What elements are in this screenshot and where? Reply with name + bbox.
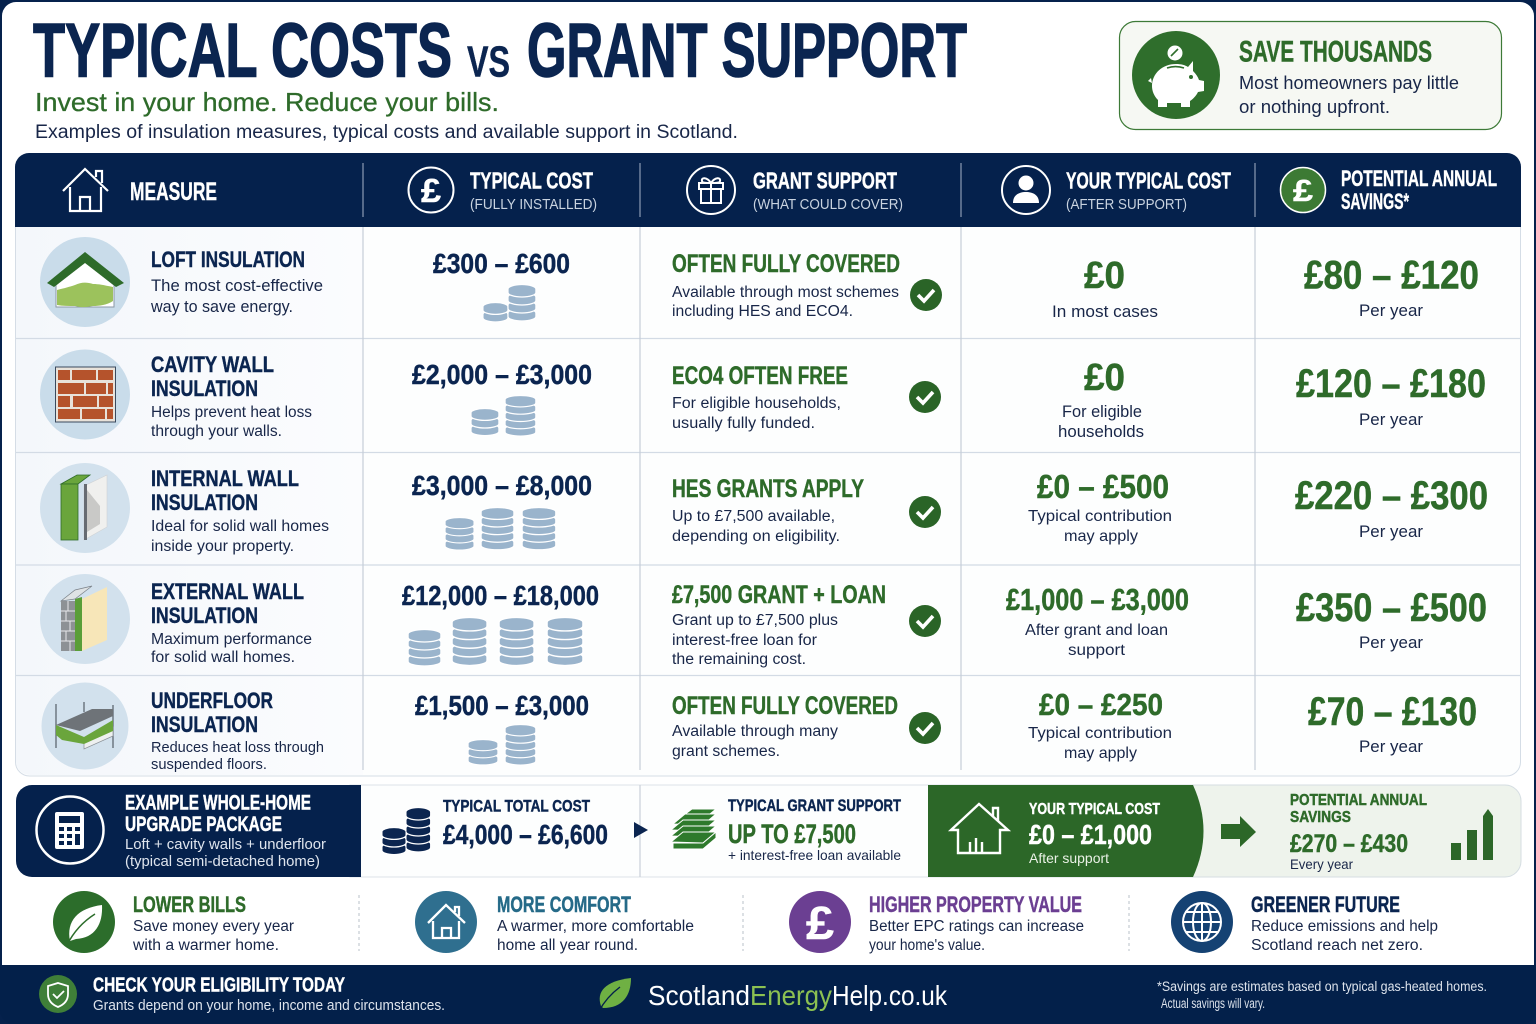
panel: typical grant support: + interest-free loan available bbox=[728, 847, 901, 863]
heading: typical cost: (FULLY INSTALLED) bbox=[470, 196, 597, 213]
row: loft insulation: £80 – £120 bbox=[1304, 254, 1479, 298]
panel: potential annual savings: £270 – £430 bbox=[1290, 830, 1408, 858]
icon: person bbox=[1002, 166, 1050, 214]
benefit: lower bills: with a warmer home. bbox=[132, 937, 279, 954]
panel: typical grant support: TYPICAL GRANT SUPPORT bbox=[728, 796, 901, 815]
row: external wall insulation: £7,500 GRANT + LOAN bbox=[672, 581, 886, 609]
row: underfloor insulation: suspended floors. bbox=[151, 756, 267, 773]
row: cavity wall insulation: For eligible bbox=[1062, 402, 1142, 421]
benefit: greener future: GREENER FUTURE bbox=[1251, 892, 1400, 917]
panel: potential annual savings bbox=[1290, 792, 1493, 872]
row: cavity wall insulation: INSULATION bbox=[151, 376, 258, 401]
row: cavity wall insulation: £0 bbox=[1084, 357, 1125, 399]
subtitle: Invest in your home. Reduce your bills. bbox=[35, 87, 499, 117]
panel: typical total cost: TYPICAL TOTAL COST bbox=[443, 796, 590, 816]
row: external wall insulation: Grant up to £7,500 plus bbox=[672, 612, 838, 629]
row: loft insulation: Per year bbox=[1359, 301, 1423, 320]
row: loft insulation: Available through most schemes bbox=[672, 284, 899, 301]
intro text: Examples of insulation measures, typical costs and available support in Scotland. bbox=[35, 122, 738, 143]
icon: navy coins bbox=[382, 808, 431, 855]
heading: potential annual savings bbox=[1341, 166, 1497, 214]
arrow: to savings bbox=[1221, 816, 1256, 847]
footnote: *Savings are estimates based on typical gas-heated homes. bbox=[1157, 979, 1487, 994]
icon: green pound: £ bbox=[1293, 173, 1313, 208]
heading: grant support: (WHAT COULD COVER) bbox=[753, 196, 903, 213]
title: GRANT SUPPORT bbox=[527, 8, 967, 94]
benefit: lower bills: LOWER BILLS bbox=[133, 892, 246, 917]
row: cavity wall insulation: ECO4 OFTEN FREE bbox=[672, 362, 848, 390]
row: cavity wall insulation: Per year bbox=[1359, 410, 1423, 429]
row: internal wall insulation: Typical contribution bbox=[1028, 508, 1172, 525]
arrow bbox=[634, 822, 648, 838]
row: internal wall insulation: may apply bbox=[1064, 528, 1138, 545]
comparison table bbox=[15, 153, 1521, 776]
row: internal wall insulation bbox=[40, 463, 1488, 555]
benefit: more comfort: A warmer, more comfortable bbox=[497, 918, 694, 935]
website name: Scotland bbox=[648, 980, 750, 1011]
row: cavity wall insulation: £2,000 – £3,000 bbox=[412, 359, 592, 390]
icon: brick wall bbox=[40, 350, 130, 440]
panel: potential annual savings: POTENTIAL ANNUAL bbox=[1290, 792, 1427, 809]
panel: package title bbox=[16, 785, 361, 877]
row: external wall insulation: support bbox=[1068, 642, 1126, 659]
row: external wall insulation: £1,000 – £3,000 bbox=[1006, 582, 1189, 617]
heading: your typical cost: (AFTER SUPPORT) bbox=[1066, 196, 1187, 213]
row: loft insulation: The most cost-effective bbox=[151, 277, 323, 295]
website name: Help.co.uk bbox=[832, 980, 948, 1011]
panel: typical grant support: UP TO £7,500 bbox=[728, 819, 856, 849]
row: cavity wall insulation: CAVITY WALL bbox=[151, 352, 274, 377]
row: external wall insulation: interest-free loan for bbox=[672, 632, 817, 649]
row: external wall insulation: the remaining cost. bbox=[672, 651, 806, 668]
panel: your typical cost: YOUR TYPICAL COST bbox=[1029, 801, 1160, 818]
callout: save thousands: or nothing upfront. bbox=[1239, 96, 1390, 117]
heading: grant support bbox=[753, 168, 903, 213]
row: internal wall insulation: £3,000 – £8,000 bbox=[412, 470, 592, 501]
row: internal wall insulation: depending on eligibility. bbox=[672, 528, 840, 545]
benefit: higher property value: Better EPC ratings can increase bbox=[869, 918, 1084, 935]
panel: your typical cost: After support bbox=[1029, 850, 1109, 866]
icon: home bbox=[63, 169, 108, 211]
row: underfloor insulation: £1,500 – £3,000 bbox=[415, 690, 589, 721]
icon: internal wall bbox=[40, 463, 130, 553]
row: loft insulation bbox=[40, 237, 1479, 327]
heading: your typical cost: YOUR TYPICAL COST bbox=[1066, 168, 1231, 194]
row: loft insulation: In most cases bbox=[1052, 302, 1158, 321]
footnote bbox=[1157, 979, 1487, 1011]
icon: pound: £ bbox=[421, 172, 442, 209]
title bbox=[33, 8, 967, 94]
panel: potential annual savings: SAVINGS bbox=[1290, 809, 1351, 826]
row: underfloor insulation: £70 – £130 bbox=[1308, 690, 1477, 734]
row: internal wall insulation: Ideal for solid wall homes bbox=[151, 518, 329, 535]
icon: external wall bbox=[40, 574, 130, 664]
row: underfloor insulation: grant schemes. bbox=[672, 743, 780, 760]
heading: grant support: GRANT SUPPORT bbox=[753, 168, 897, 194]
row: external wall insulation: Per year bbox=[1359, 633, 1423, 652]
eligibility call to action bbox=[93, 974, 445, 1014]
benefits row bbox=[53, 891, 1438, 954]
heading: measure: MEASURE bbox=[130, 178, 217, 206]
icon: green pound bbox=[1280, 168, 1326, 212]
heading: your typical cost bbox=[1066, 168, 1231, 213]
row: internal wall insulation: Up to £7,500 available, bbox=[672, 508, 835, 525]
row: internal wall insulation: inside your property. bbox=[151, 538, 294, 555]
row: underfloor insulation: INSULATION bbox=[151, 712, 258, 737]
benefit: higher property value: your home's value. bbox=[869, 937, 985, 954]
row: internal wall insulation: £220 – £300 bbox=[1295, 474, 1488, 518]
row: external wall insulation: for solid wall homes. bbox=[151, 649, 295, 666]
callout: save thousands bbox=[1120, 22, 1502, 130]
benefit: greener future: Reduce emissions and help bbox=[1251, 918, 1438, 935]
benefit: greener future: Scotland reach net zero. bbox=[1251, 937, 1423, 954]
row: loft insulation: OFTEN FULLY COVERED bbox=[672, 250, 900, 278]
title: TYPICAL COSTS bbox=[33, 8, 452, 94]
row: cavity wall insulation: For eligible households, bbox=[672, 395, 841, 412]
icon: gift bbox=[687, 166, 735, 214]
row: underfloor insulation: OFTEN FULLY COVERED bbox=[672, 692, 898, 720]
row: cavity wall insulation: usually fully funded. bbox=[672, 415, 815, 432]
row: loft insulation: including HES and ECO4. bbox=[672, 303, 853, 320]
row: internal wall insulation: INSULATION bbox=[151, 490, 258, 515]
benefit: more comfort bbox=[415, 891, 694, 954]
row: cavity wall insulation: through your walls. bbox=[151, 423, 282, 440]
row: underfloor insulation: UNDERFLOOR bbox=[151, 688, 273, 713]
panel: package title: UPGRADE PACKAGE bbox=[125, 813, 282, 836]
benefit: lower bills bbox=[53, 891, 294, 954]
icon: rising bars bbox=[1451, 809, 1493, 860]
row: underfloor insulation bbox=[42, 682, 1477, 773]
website name bbox=[648, 980, 948, 1011]
icon: underfloor bbox=[42, 682, 128, 770]
benefit: greener future bbox=[1171, 891, 1438, 954]
icon: shield bbox=[39, 975, 77, 1013]
icon: money stack bbox=[671, 809, 716, 849]
footnote: Actual savings will vary. bbox=[1161, 996, 1265, 1011]
row: external wall insulation: £350 – £500 bbox=[1296, 586, 1487, 630]
row: cavity wall insulation: £120 – £180 bbox=[1296, 362, 1486, 406]
panel: your typical cost: £0 – £1,000 bbox=[1029, 819, 1152, 850]
callout: save thousands: Most homeowners pay little bbox=[1239, 72, 1459, 93]
row: internal wall insulation: Per year bbox=[1359, 522, 1423, 541]
row: loft insulation: £0 bbox=[1084, 255, 1125, 297]
benefit: higher property value: £ bbox=[806, 897, 834, 949]
icon: piggy bank bbox=[1132, 31, 1220, 119]
row: underfloor insulation: Available through many bbox=[672, 723, 838, 740]
table body bbox=[16, 220, 1520, 776]
row: external wall insulation: £12,000 – £18,000 bbox=[402, 580, 599, 611]
row: internal wall insulation: INTERNAL WALL bbox=[151, 466, 299, 491]
row: loft insulation: £300 – £600 bbox=[433, 248, 570, 279]
row: internal wall insulation: £0 – £500 bbox=[1037, 468, 1169, 505]
row: external wall insulation: After grant and loan bbox=[1025, 622, 1168, 639]
heading: typical cost bbox=[470, 168, 597, 213]
row: cavity wall insulation: Helps prevent heat loss bbox=[151, 404, 312, 421]
row: external wall insulation: EXTERNAL WALL bbox=[151, 579, 304, 604]
strip background bbox=[340, 785, 1521, 877]
website name: Energy bbox=[750, 980, 832, 1011]
example package strip bbox=[16, 785, 1521, 877]
panel: package title: (typical semi-detached home) bbox=[125, 853, 320, 870]
benefit: more comfort: MORE COMFORT bbox=[497, 892, 631, 917]
row: underfloor insulation: £0 – £250 bbox=[1039, 687, 1163, 722]
row: external wall insulation: INSULATION bbox=[151, 603, 258, 628]
row: cavity wall insulation bbox=[40, 350, 1486, 441]
heading: typical cost: TYPICAL COST bbox=[470, 168, 593, 194]
row: external wall insulation bbox=[40, 574, 1487, 668]
row: loft insulation: way to save energy. bbox=[150, 298, 293, 316]
benefit: higher property value: HIGHER PROPERTY VALUE bbox=[869, 892, 1082, 917]
row: underfloor insulation: Typical contribution bbox=[1028, 725, 1172, 742]
benefit: higher property value bbox=[789, 891, 1084, 954]
eligibility call to action: CHECK YOUR ELIGIBILITY TODAY bbox=[93, 974, 345, 996]
row: loft insulation: LOFT INSULATION bbox=[151, 247, 305, 272]
panel: typical total cost bbox=[382, 796, 608, 855]
icon: white house bbox=[951, 804, 1008, 853]
title: VS bbox=[467, 38, 510, 86]
panel: typical total cost: £4,000 – £6,600 bbox=[443, 819, 608, 850]
row: underfloor insulation: Reduces heat loss through bbox=[151, 739, 324, 756]
benefit: more comfort: home all year round. bbox=[497, 937, 638, 954]
row: external wall insulation: Maximum performance bbox=[151, 631, 312, 648]
panel: potential annual savings: Every year bbox=[1290, 856, 1353, 872]
row: underfloor insulation: may apply bbox=[1064, 745, 1137, 762]
table header bbox=[15, 153, 1521, 227]
icon: leaf logo bbox=[599, 978, 631, 1011]
icon: loft bbox=[40, 237, 130, 327]
icon: pound bbox=[408, 168, 454, 212]
benefit: lower bills: Save money every year bbox=[133, 918, 294, 935]
footer bbox=[0, 965, 1536, 1024]
row: internal wall insulation: HES GRANTS APPLY bbox=[672, 475, 864, 503]
callout: save thousands: SAVE THOUSANDS bbox=[1239, 36, 1432, 68]
heading: potential annual savings: SAVINGS* bbox=[1341, 189, 1409, 214]
panel: typical grant support bbox=[671, 796, 901, 863]
eligibility call to action: Grants depend on your home, income and circumstances. bbox=[93, 998, 445, 1014]
icon: calculator bbox=[36, 796, 104, 864]
panel: your typical cost bbox=[928, 785, 1204, 877]
panel: package title: EXAMPLE WHOLE-HOME bbox=[125, 792, 311, 814]
panel: package title: Loft + cavity walls + underfloor bbox=[125, 836, 326, 853]
row: underfloor insulation: Per year bbox=[1359, 737, 1423, 756]
row: cavity wall insulation: households bbox=[1058, 422, 1144, 441]
